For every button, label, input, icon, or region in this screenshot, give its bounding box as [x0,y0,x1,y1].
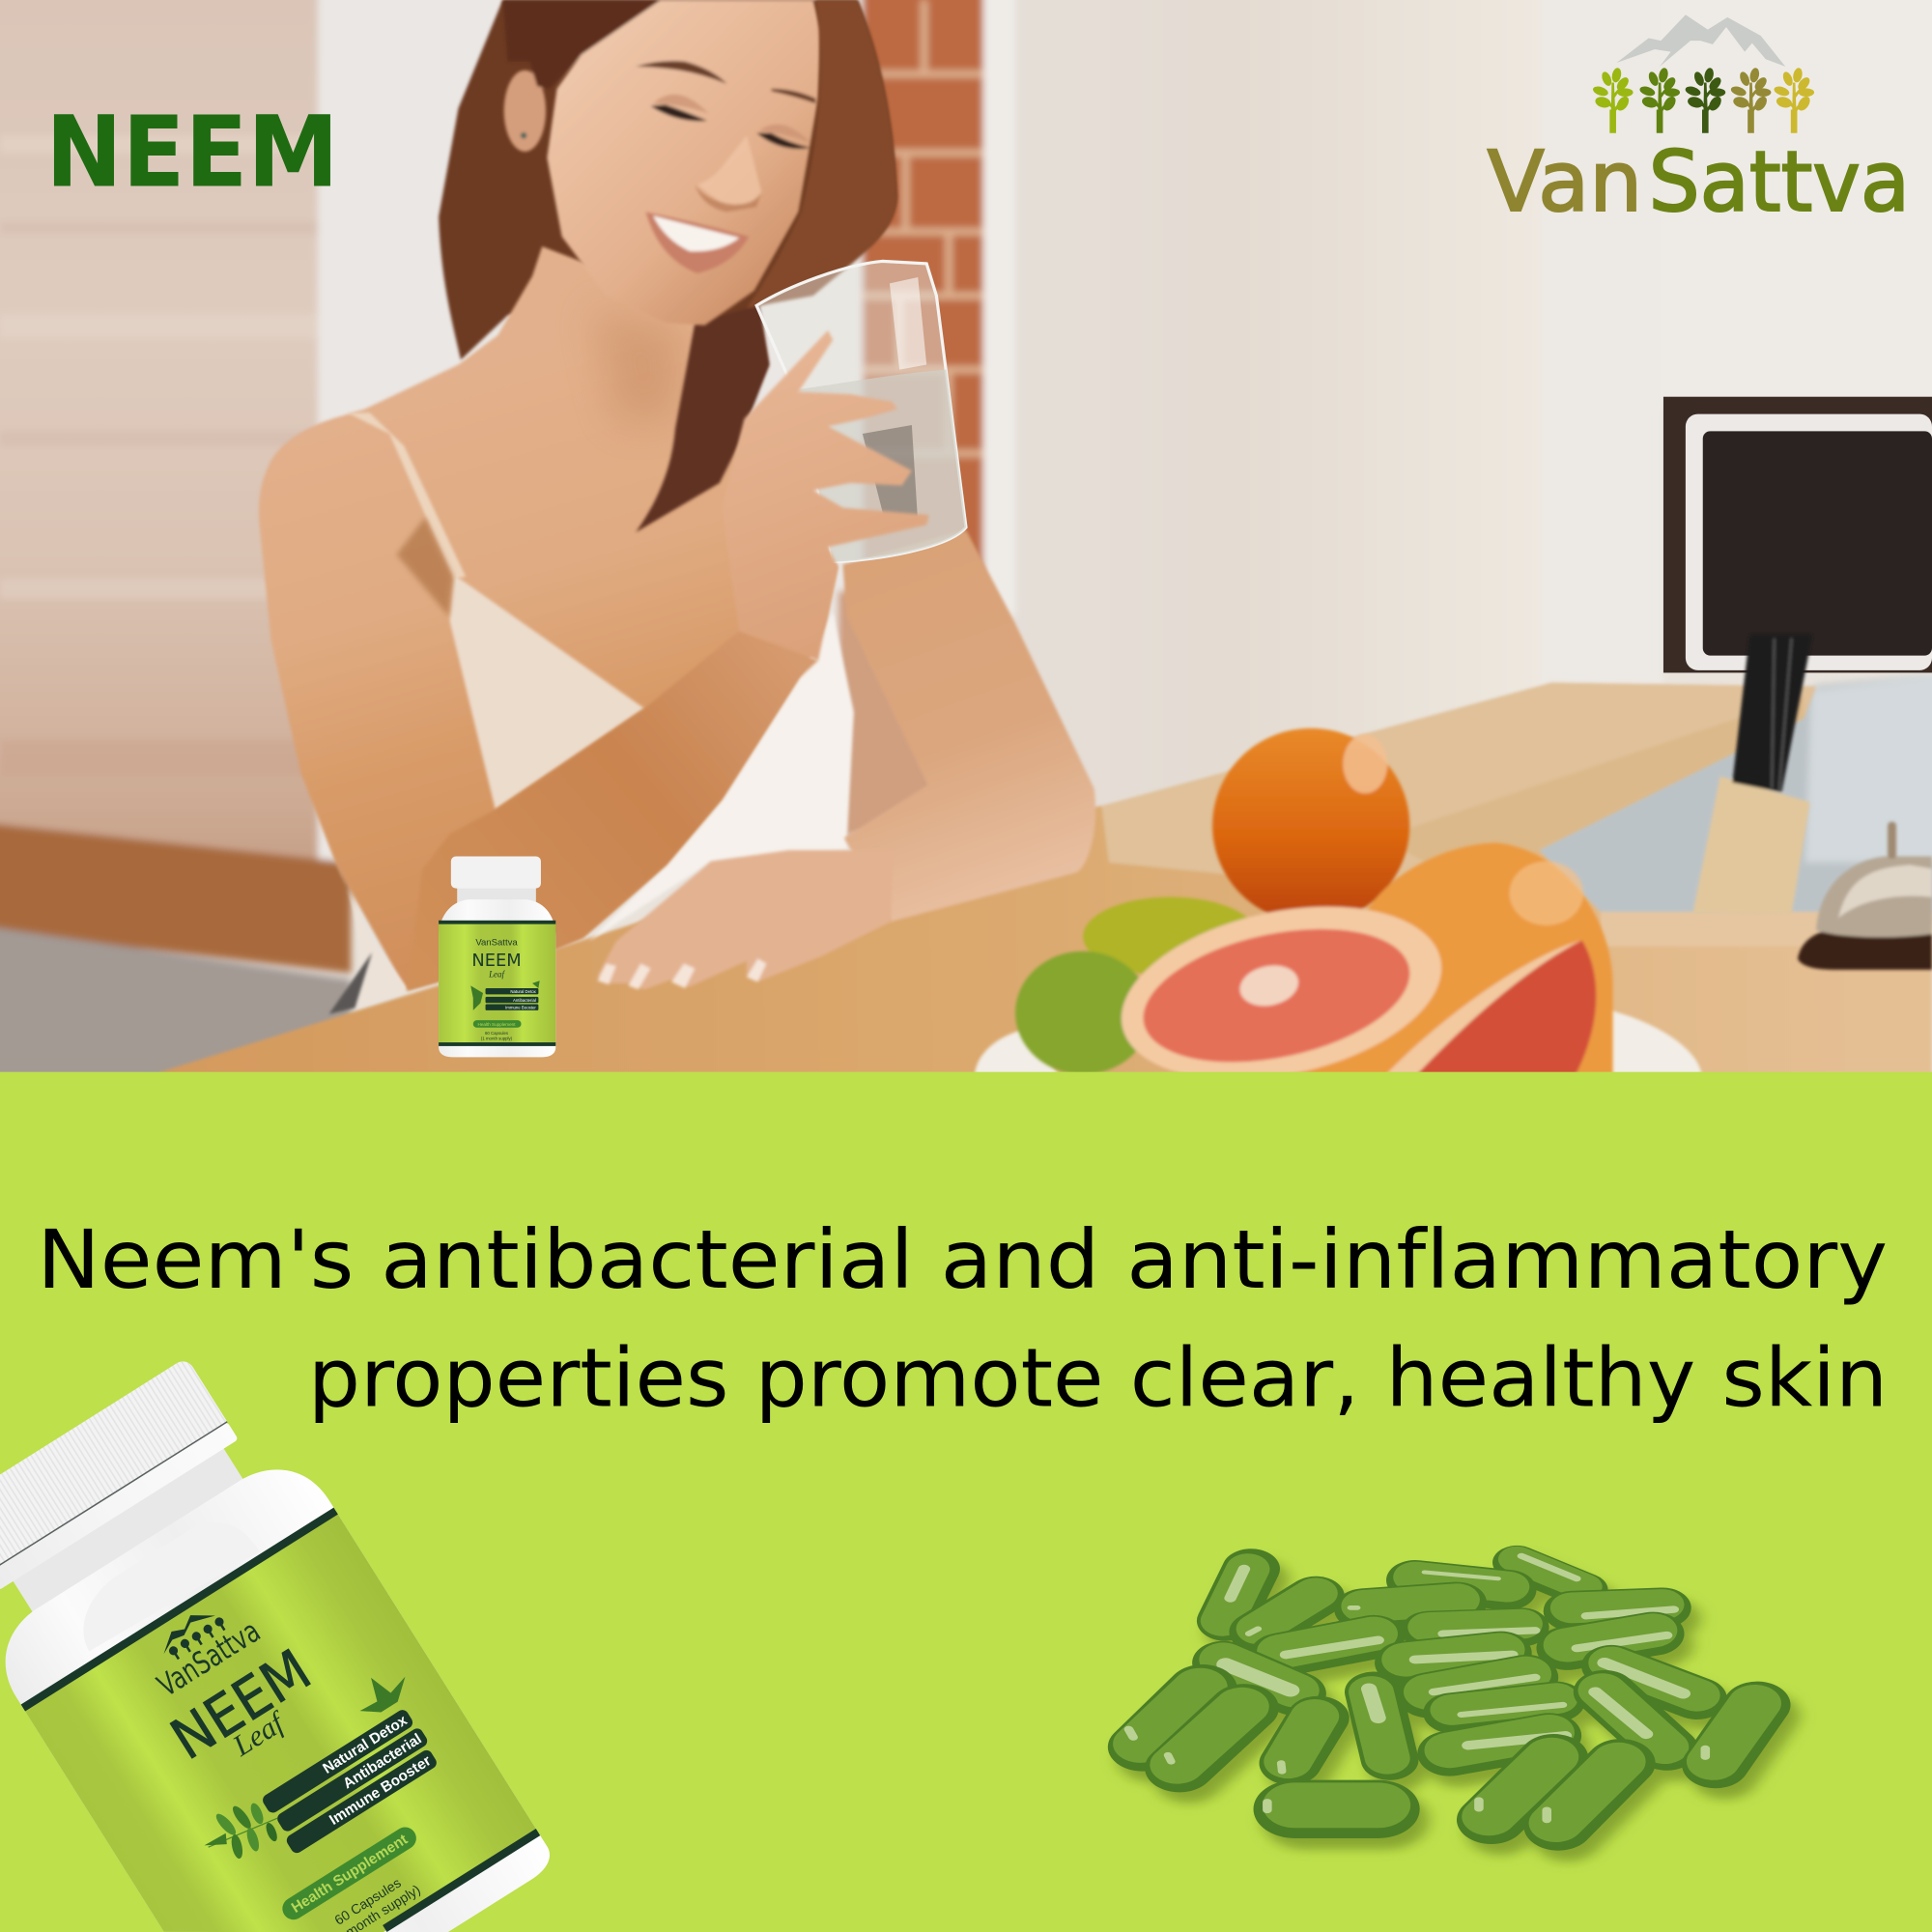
panel: kitchen photo [0,0,1932,1106]
label benefit pills [260,1706,441,1856]
bottle label: NEEM [471,951,522,971]
woman: face [502,0,820,326]
logo icon: five trees [1592,67,1814,133]
headline text: properties promote clear, healthy skin [308,1330,1888,1425]
knife block [1693,635,1812,914]
label logo: VanSattva [151,1612,267,1704]
bottle label [439,921,555,1046]
bottle body [439,899,555,1057]
woman: resting arm [842,529,1095,922]
label benefit pills: Antibacterial [340,1731,425,1792]
headline text [37,1212,1888,1425]
bottle label: Health Supplement [478,1022,516,1027]
bottle label: Immune Booster [505,1006,536,1010]
bottle cap [0,1357,239,1590]
bottle label: Leaf [488,969,505,979]
label leaf top [348,1662,414,1721]
woman: front hair strand [747,0,897,308]
woman: tank top right panel [589,612,854,941]
woman: top lower left sliver [336,865,409,1007]
woman: neck, shoulder, chest and left arm [259,246,838,991]
logo: VanSattva [1488,14,1910,231]
bottle neck [11,1444,248,1621]
label capsule count: 60 Capsules [331,1875,404,1928]
microwave [1663,397,1932,672]
green capsules pile [1128,1556,1757,1827]
large tilted product bottle [0,1333,557,1932]
woman: neck shadow [591,308,684,425]
fruit plate [975,1007,1701,1074]
bottle neck [457,885,536,904]
logo wordmark: Van [1488,133,1642,231]
small product bottle [439,856,555,1057]
label benefit pills: Immune Booster [327,1752,434,1829]
bottle label [21,1508,540,1932]
label logo [136,1589,267,1704]
service bell [1798,822,1932,970]
logo: VanSattva: Sattva [1649,133,1910,231]
photo background: walls and brick [0,0,1932,1084]
headline text: Neem's antibacterial and anti-inflammatory [37,1212,1888,1307]
bottle label: VanSattva [475,937,518,948]
fruit: apples, oranges, grapefruit [1015,728,1613,1106]
woman: strap [348,412,466,579]
woman: tank top left panel [450,574,644,810]
bottle label: Antibacterial [513,998,536,1003]
woman: resting hand [598,850,894,989]
glass of water [756,261,966,562]
bottle body [0,1446,557,1932]
woman: front hair over chest [636,305,769,532]
label health supplement pill: Health Supplement [289,1832,411,1917]
label neem leaf sprig [193,1787,288,1875]
woman: raised forearm [407,631,818,991]
woman: armpit shadow [397,518,453,616]
woman: hair back [437,0,898,409]
heading: NEEM: NEEM [45,96,339,211]
counter top [160,683,1932,1074]
bottle label: Leaf [226,1704,293,1763]
bottle label: 60 Capsules [485,1031,508,1036]
woman: chair back [329,952,372,1014]
logo icon: mountains [1616,14,1785,67]
woman: hand holding glass [722,330,929,661]
panel: green lower section [0,1072,1932,1932]
bottle cap [451,856,541,889]
label benefit pills: Natural Detox [320,1712,411,1777]
label title: NEEM [159,1637,322,1773]
bottle label: Natural Detox [510,989,537,994]
bottle label: (1 month supply) [481,1037,513,1041]
